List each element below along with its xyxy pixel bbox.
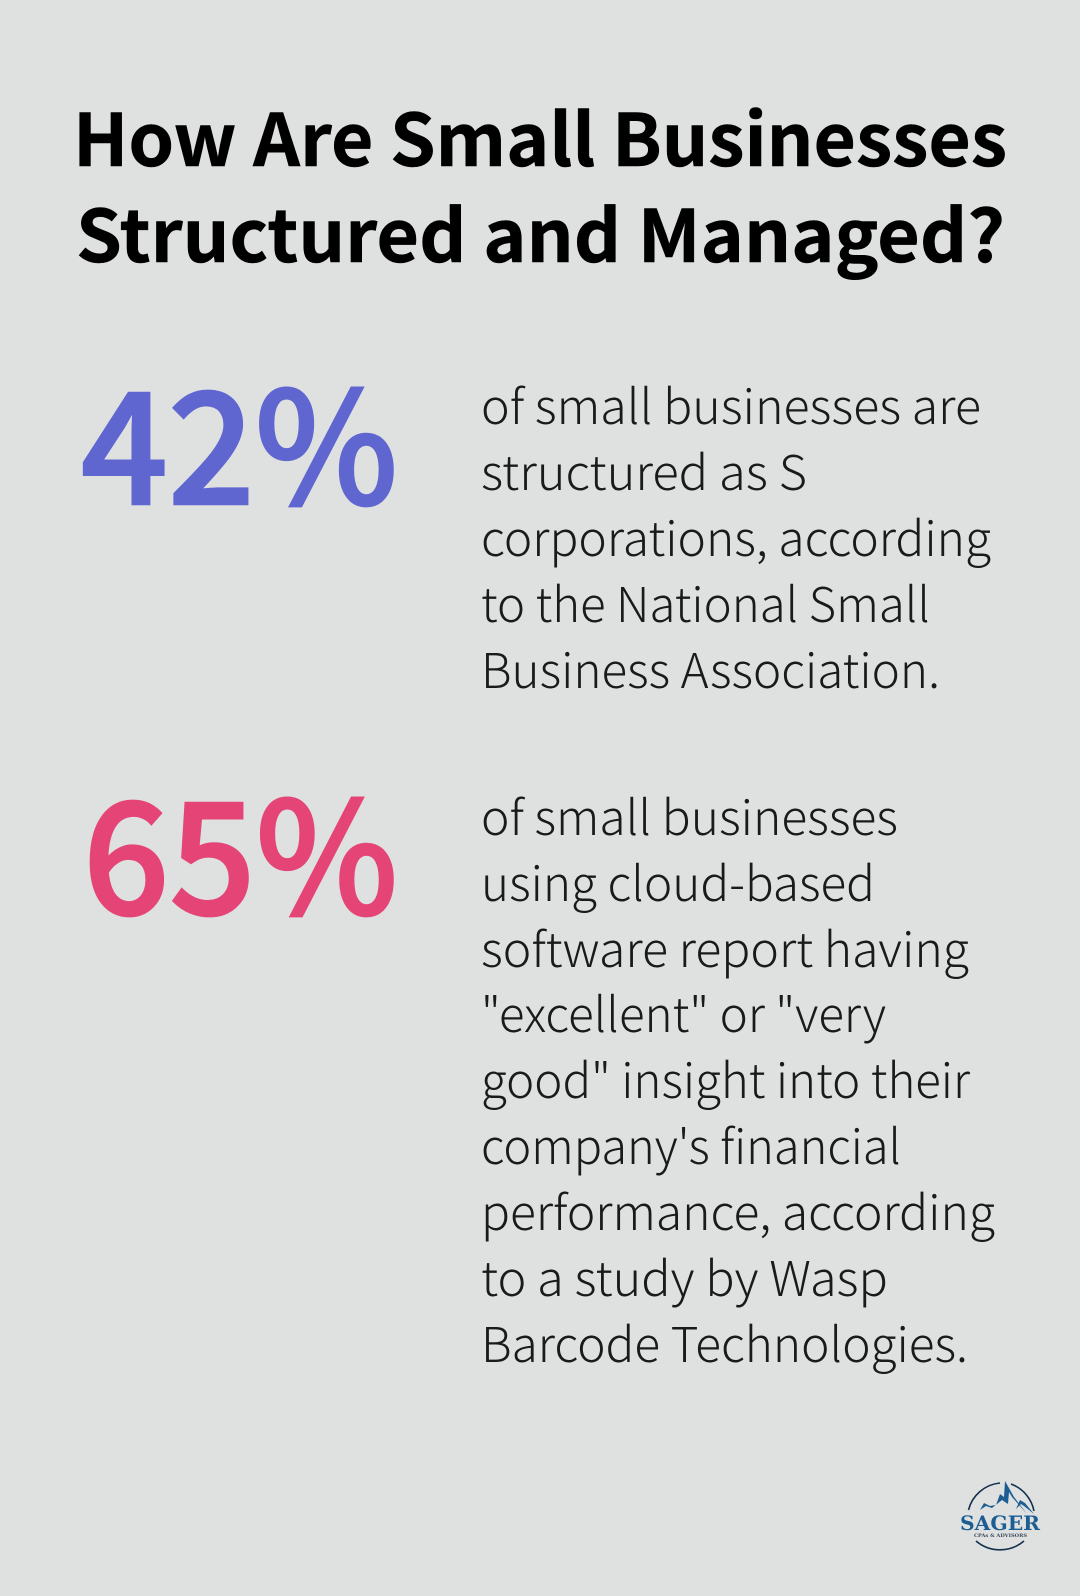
- icon: Sager logo: CPAs & ADVISORS: [974, 1533, 1027, 1539]
- text block: S corporations: to the National Small: [481, 566, 930, 636]
- text block: S corporations: structured as S: [481, 434, 807, 504]
- title: How Are Small Businesses: [73, 82, 1007, 187]
- text block: cloud-based software: "excellent" or "very: [481, 976, 886, 1046]
- stat: 42%: 42%: [81, 324, 398, 549]
- title: Structured and Managed?: [76, 178, 1005, 283]
- text block: cloud-based software: good" insight into their: [481, 1042, 971, 1112]
- text block: cloud-based software: software report having: [481, 911, 969, 981]
- text block: S corporations: corporations, according: [481, 500, 991, 570]
- title: [73, 82, 1007, 283]
- text block: S corporations: [481, 368, 991, 702]
- text block: cloud-based software: to a study by Wasp: [481, 1240, 888, 1310]
- text block: cloud-based software: using cloud-based: [481, 845, 875, 915]
- text block: S corporations: of small businesses are: [481, 368, 981, 438]
- text block: cloud-based software: company's financial: [481, 1108, 901, 1178]
- text block: cloud-based software: performance, according: [481, 1174, 995, 1244]
- icon: Sager logo: SAGER: [960, 1511, 1040, 1535]
- stat: 65%: 65%: [83, 734, 398, 959]
- icon: Sager logo: [960, 1481, 1040, 1550]
- text block: cloud-based software: [481, 779, 995, 1376]
- text block: cloud-based software: of small businesses: [481, 779, 898, 849]
- text block: cloud-based software: Barcode Technologies.: [481, 1306, 968, 1376]
- text block: S corporations: Business Association.: [481, 632, 940, 702]
